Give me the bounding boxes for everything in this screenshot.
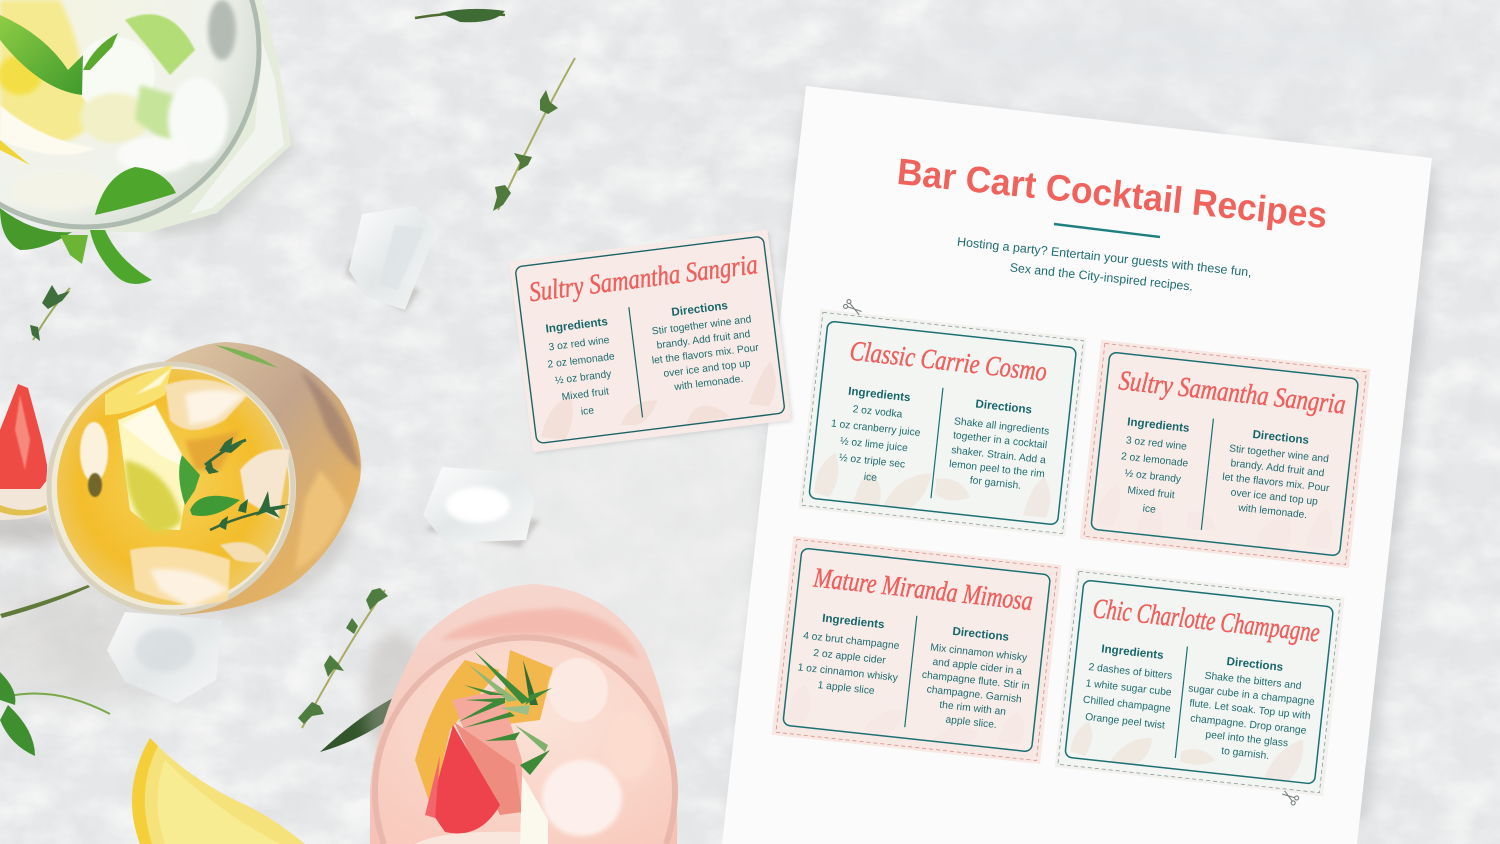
title: Bar Cart Cocktail Recipes	[895, 151, 1329, 236]
directions: with lemonade.	[1237, 503, 1308, 521]
directions	[645, 296, 763, 396]
panel: loose cut-out card Sultry Samantha Sangria	[509, 229, 792, 453]
directions: Directions	[671, 299, 729, 319]
directions	[917, 622, 1035, 734]
intro text: Sex and the City-inspired recipes.	[1009, 260, 1194, 294]
directions: sugar cube in a champagne	[1188, 683, 1316, 708]
directions	[1219, 425, 1336, 523]
icon: ice cube top	[345, 206, 436, 312]
ingredients: 2 oz lemonade	[1120, 451, 1189, 470]
directions: and apple cider in a	[932, 657, 1023, 677]
ingredients: Ingredients	[1101, 642, 1164, 662]
ingredients: ½ oz lime juice	[839, 436, 909, 454]
intro text: Hosting a party? Entertain your guests with these fun,	[956, 235, 1252, 279]
ingredients: ice	[1142, 503, 1157, 516]
directions	[1181, 651, 1319, 766]
ingredients: ½ oz brandy	[554, 369, 613, 387]
column divider	[629, 307, 643, 417]
icon: ice cube bottom	[107, 612, 222, 703]
icon: thyme sprigs and rosemary on table	[0, 9, 575, 756]
ingredients	[1115, 415, 1193, 519]
icon: grapefruit wedge	[0, 384, 75, 546]
card title: Chic Charlotte Champagne	[1091, 593, 1321, 649]
icon: scissors top	[843, 299, 863, 317]
card title: Sultry Samantha Sangria	[527, 249, 759, 308]
directions: Directions	[1226, 655, 1284, 674]
panel: recipe sheet	[722, 86, 1432, 844]
directions: champagne. Garnish	[926, 684, 1023, 706]
card title: Classic Carrie Cosmo	[848, 336, 1048, 388]
ingredients: ½ oz brandy	[1124, 468, 1182, 485]
directions: with lemonade.	[673, 374, 744, 393]
directions: Shake all ingredients	[953, 416, 1050, 437]
directions: Stir together wine and	[1229, 443, 1330, 465]
glass: amber citrus cocktail	[46, 342, 361, 615]
icon: scissors bottom	[1281, 788, 1299, 806]
ingredients: ice	[580, 405, 595, 418]
glass: lemon and basil water	[0, 0, 295, 284]
directions: let the flavors mix. Pour	[651, 342, 760, 367]
icon: mint and thyme garnish	[179, 437, 290, 530]
ingredients: Ingredients	[1127, 415, 1190, 435]
directions: Directions	[952, 625, 1010, 644]
ingredients: Mixed fruit	[1127, 485, 1175, 501]
ingredients: 2 oz apple cider	[813, 648, 887, 667]
directions: shaker. Strain. Add a	[951, 445, 1047, 466]
ingredients: Ingredients	[822, 612, 885, 631]
ingredients: 3 oz red wine	[1125, 435, 1188, 453]
leaf pattern	[786, 683, 1026, 751]
glass: pink grapefruit cocktail	[365, 584, 677, 844]
directions	[947, 395, 1052, 494]
peel, grapefruit and ice in the glass	[415, 650, 655, 844]
ingredients	[1081, 641, 1177, 732]
leaf pattern	[535, 361, 780, 443]
ingredients: 4 oz brut champagne	[803, 631, 900, 652]
page shadow	[730, 88, 1440, 820]
ingredients: ½ oz triple sec	[838, 453, 906, 471]
directions: champagne. Drop orange	[1190, 713, 1307, 737]
directions: brandy. Add fruit and	[656, 329, 751, 352]
icon: lemon slice	[132, 738, 305, 844]
ingredients: ice	[863, 472, 878, 484]
ingredients: 2 oz vodka	[852, 404, 903, 421]
directions: apple slice.	[945, 715, 997, 731]
icon: basil leaves	[0, 15, 176, 284]
ingredients: Ingredients	[545, 315, 608, 336]
directions: peel into the glass	[1205, 730, 1289, 749]
panel: recipe card Sultry Samantha Sangria	[1080, 340, 1371, 568]
directions: Shake the bitters and	[1204, 671, 1302, 692]
directions: champagne flute. Stir in	[921, 670, 1030, 692]
directions: Directions	[975, 397, 1033, 417]
directions: the rim with an	[939, 700, 1007, 718]
ingredients: Ingredients	[848, 385, 911, 404]
ingredients: Orange peel twist	[1085, 712, 1165, 732]
directions: for garnish.	[969, 475, 1022, 492]
ingredients: 1 white sugar cube	[1085, 678, 1172, 699]
directions: over ice and top up	[663, 358, 751, 380]
ingredients: 3 oz red wine	[548, 335, 610, 353]
column divider	[1175, 647, 1187, 758]
directions: let the flavors mix. Pour	[1222, 472, 1330, 495]
directions: to garnish.	[1221, 746, 1270, 762]
panel: recipe card Mature Miranda Mimosa	[772, 536, 1062, 764]
title divider	[1054, 224, 1160, 237]
lemon and ice in the glass	[80, 365, 290, 607]
leaf pattern	[1070, 715, 1304, 782]
ingredients	[795, 610, 905, 700]
ingredients: 1 oz cinnamon whisky	[797, 662, 899, 684]
icon: rosemary garnish	[458, 651, 552, 775]
ingredients: Chilled champagne	[1082, 695, 1171, 715]
ingredients: 1 oz cranberry juice	[830, 418, 921, 439]
card title: Sultry Samantha Sangria	[1117, 365, 1347, 421]
directions: lemon peel to the rim	[949, 459, 1045, 480]
card title: Mature Miranda Mimosa	[811, 562, 1034, 617]
ingredients: 1 apple slice	[817, 680, 875, 697]
directions: flute. Let soak. Top up with	[1189, 698, 1311, 722]
ingredients	[825, 383, 925, 488]
ingredients: 2 oz lemonade	[547, 351, 616, 371]
column divider	[1201, 419, 1213, 530]
directions: over ice and top up	[1230, 487, 1319, 508]
panel: recipe card Classic Carrie Cosmo	[799, 309, 1087, 537]
directions: Mix cinnamon whisky	[930, 642, 1028, 664]
ingredients: 2 dashes of bitters	[1088, 662, 1173, 682]
directions: Directions	[1252, 428, 1310, 447]
ingredients: Mixed fruit	[561, 386, 610, 403]
icon: ice cube middle	[423, 467, 540, 548]
column divider	[931, 388, 943, 498]
column divider	[905, 616, 917, 727]
panel: recipe card Chic Charlotte Champagne	[1055, 568, 1345, 796]
directions: together in a cocktail	[953, 430, 1048, 451]
leaf pattern	[813, 451, 1053, 524]
directions: Stir together wine and	[651, 314, 752, 338]
ingredients	[542, 315, 622, 421]
leaf pattern	[1095, 482, 1335, 555]
directions: brandy. Add fruit and	[1230, 458, 1325, 479]
